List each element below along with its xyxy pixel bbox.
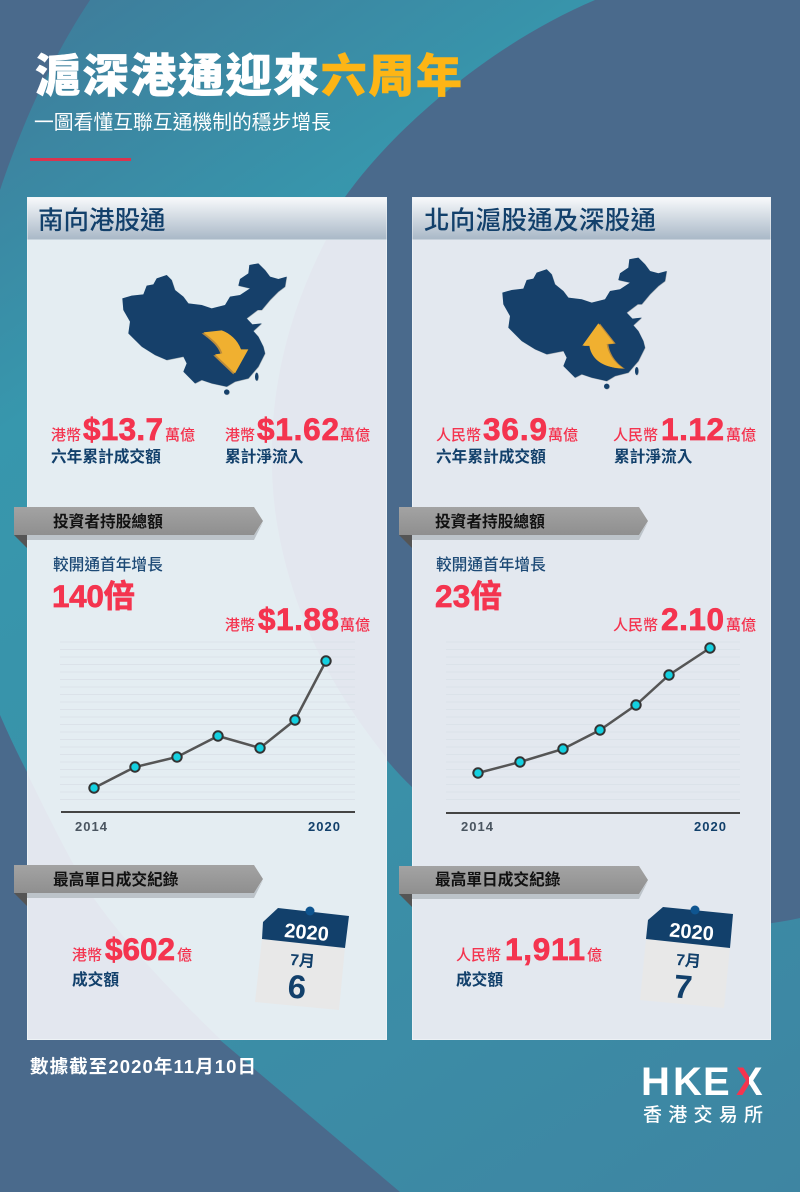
icon: calendar 7 July: 7月 xyxy=(675,952,702,971)
stat: record turnover: 億 xyxy=(177,947,192,964)
line chart: southbound holdings xyxy=(60,642,355,834)
line chart: southbound holdings: 2014 xyxy=(75,819,108,834)
stat: six-year turnover: 人民幣 xyxy=(436,427,481,444)
stat: net inflow: $1.62 xyxy=(257,411,339,447)
map: China with southward arrow xyxy=(122,263,287,395)
stat: record turnover: 成交額 xyxy=(456,970,503,989)
icon: calendar 7 July: 7 xyxy=(672,967,694,1006)
subtitle: 一圖看懂互聯互通機制的穩步增長 xyxy=(34,112,331,134)
stat: net inflow: 萬億 xyxy=(340,427,370,444)
stat: net inflow: 1.12 xyxy=(661,411,724,447)
growth note: 140倍 xyxy=(52,578,135,614)
stat: holdings value: 人民幣 xyxy=(613,617,658,634)
growth note: 較開通首年增長 xyxy=(53,556,163,574)
stat: six-year turnover xyxy=(436,411,578,466)
map: China with northward arrow xyxy=(502,258,667,389)
ribbon: holdings: 投資者持股總額 xyxy=(435,512,545,531)
logo: HKEX: K xyxy=(673,1060,702,1104)
panel: southbound xyxy=(14,198,386,1040)
title rule xyxy=(30,158,131,161)
stat: record turnover: $602 xyxy=(105,931,175,967)
stat: holdings value: 萬億 xyxy=(340,617,370,634)
panel header: southbound xyxy=(28,198,386,240)
stat: six-year turnover xyxy=(51,411,195,466)
stat: record turnover: 港幣 xyxy=(72,947,102,964)
stat: six-year turnover: 港幣 xyxy=(51,427,81,444)
line chart: northbound holdings xyxy=(446,642,740,834)
stat: record turnover: 億 xyxy=(587,947,602,964)
stat: six-year turnover: 36.9 xyxy=(483,411,547,447)
icon: calendar 7 July xyxy=(640,906,733,1008)
ribbon: holdings xyxy=(14,507,263,548)
icon: calendar 7 July: 2020 xyxy=(668,920,715,945)
stat: holdings value: 港幣 xyxy=(225,617,255,634)
stat: net inflow xyxy=(225,411,370,466)
icon: calendar 6 July: 6 xyxy=(286,967,308,1006)
logo: HKEX: X xyxy=(736,1060,763,1104)
title: 滬深港通迎來六周年 xyxy=(35,50,462,102)
ribbon: holdings: 投資者持股總額 xyxy=(53,512,163,531)
footnote: 數據截至2020年11月10日 xyxy=(30,1056,256,1077)
panel header: northbound xyxy=(412,198,770,240)
stat: six-year turnover: 六年累計成交額 xyxy=(51,447,161,466)
stat: record turnover: 人民幣 xyxy=(456,947,501,964)
stat: holdings value: 萬億 xyxy=(726,617,756,634)
stat: six-year turnover: 六年累計成交額 xyxy=(436,447,546,466)
line chart: southbound holdings: 2020 xyxy=(308,819,340,834)
ribbon: record: 最高單日成交紀錄 xyxy=(435,870,561,889)
line chart: northbound holdings: 2020 xyxy=(694,819,726,834)
logo: HKEX xyxy=(641,1060,763,1126)
logo: HKEX: E xyxy=(703,1060,730,1104)
stat: holdings value xyxy=(613,601,756,637)
stat: record turnover xyxy=(72,931,192,989)
ribbon: record xyxy=(399,866,648,907)
icon: calendar 6 July: 2020 xyxy=(283,920,330,946)
stat: net inflow: 人民幣 xyxy=(613,427,658,444)
stat: net inflow xyxy=(613,411,756,466)
icon: calendar 6 July xyxy=(255,906,349,1010)
stat: record turnover xyxy=(456,931,602,989)
stat: holdings value: $1.88 xyxy=(258,601,339,637)
stat: record turnover: 成交額 xyxy=(72,970,119,989)
stat: six-year turnover: 萬億 xyxy=(165,427,195,444)
panel header: southbound: 南向港股通 xyxy=(38,207,166,235)
ribbon: holdings xyxy=(399,507,648,548)
stat: holdings value xyxy=(225,601,370,637)
stat: six-year turnover: $13.7 xyxy=(83,411,163,447)
stat: net inflow: 萬億 xyxy=(726,427,756,444)
icon: calendar 6 July: 7月 xyxy=(289,952,316,971)
logo: HKEX: 香港交易所 xyxy=(643,1104,763,1126)
stat: net inflow: 港幣 xyxy=(225,427,255,444)
logo: HKEX: H xyxy=(641,1060,670,1104)
panel header: northbound: 北向滬股通及深股通 xyxy=(424,207,656,235)
stat: net inflow: 累計淨流入 xyxy=(614,447,693,466)
stat: record turnover: 1,911 xyxy=(505,931,585,967)
stat: six-year turnover: 萬億 xyxy=(548,427,578,444)
ribbon: record: 最高單日成交紀錄 xyxy=(53,870,179,889)
growth note: 較開通首年增長 xyxy=(436,556,546,574)
stat: net inflow: 累計淨流入 xyxy=(225,447,304,466)
ribbon: record xyxy=(14,865,263,906)
growth note xyxy=(52,556,163,614)
line chart: northbound holdings: 2014 xyxy=(461,819,494,834)
growth note: 23倍 xyxy=(435,578,502,614)
panel: northbound xyxy=(399,198,770,1040)
growth note xyxy=(435,556,546,614)
stat: holdings value: 2.10 xyxy=(661,601,724,637)
